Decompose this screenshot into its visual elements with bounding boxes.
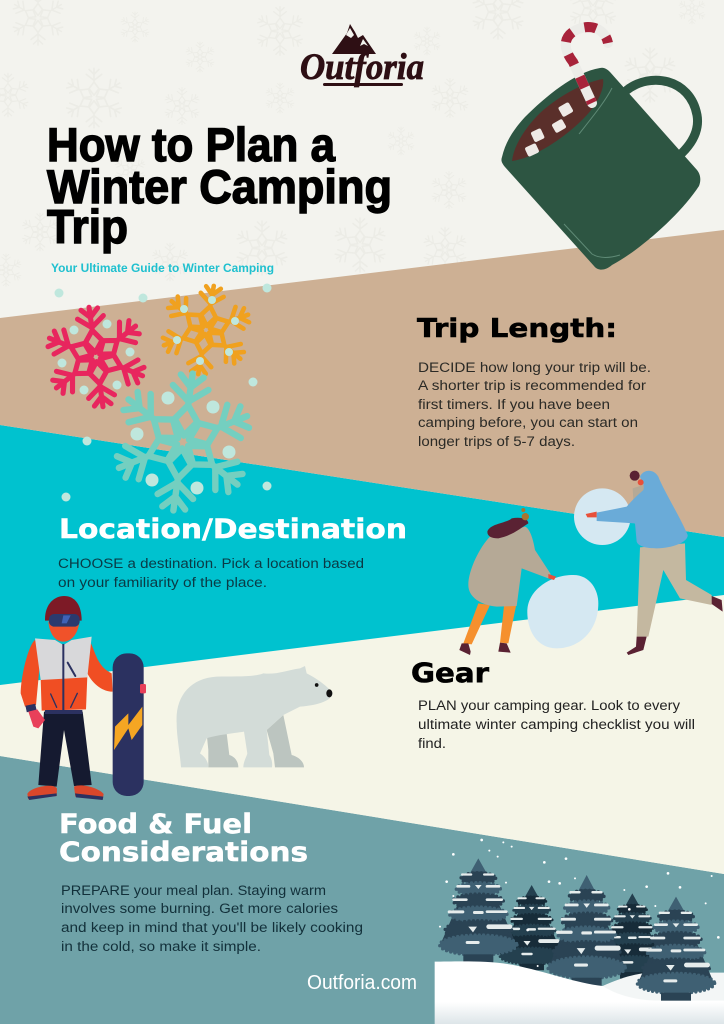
subtitle: Your Ultimate Guide to Winter Camping [51,261,274,275]
heading: gear: Gear [411,658,490,689]
text: gear body: find. [418,736,446,751]
panel: tan trip length band [0,230,724,537]
text: gear body [418,698,695,751]
text: trip length body [418,360,651,449]
text: trip length body: A shorter trip is recommended for [418,378,647,393]
title [47,118,392,253]
illustration: snowboarder [21,596,146,800]
text: trip length body: first timers. If you have been [418,397,610,412]
text: gear body: PLAN your camping gear. Look to every [418,698,680,713]
title: Winter Camping [47,160,392,213]
heading: food and fuel [59,809,308,868]
text: food and fuel body [61,883,363,954]
text: food and fuel body: PREPARE your meal plan. Staying warm [61,883,326,898]
logo: Outforia [300,47,424,88]
text: food and fuel body: involves some burning. Get more calories [61,901,338,916]
icon: cocoa mug with candy cane [501,27,700,270]
text: trip length body: longer trips of 5-7 days. [418,434,575,449]
illustration: snowy pine trees [435,839,724,1024]
heading: food and fuel: Considerations [59,837,308,868]
text: location body [58,556,364,590]
text: location body: on your familiarity of the place. [58,575,267,590]
heading: location: Location/Destination [59,514,407,545]
faint background snowflakes [0,0,706,286]
heading: trip length: Trip Length: [417,314,617,344]
icon: falling snowflakes [39,278,271,520]
panel: slate food band [0,756,724,1024]
text: gear body: ultimate winter camping checklist you will [418,717,695,732]
text: trip length body: camping before, you can start on [418,415,638,430]
heading: food and fuel: Food & Fuel [59,809,252,840]
text: food and fuel body: and keep in mind that you'll be likely cooking [61,920,363,935]
title: Trip [47,200,128,253]
panel: teal location band [0,425,724,685]
panel: cream gear band [0,595,724,874]
text: food and fuel body: in the cold, so make it simple. [61,939,261,954]
illustration: people rolling snowballs [459,471,723,655]
footer website: Outforia.com [307,972,417,994]
illustration: polar bear [177,666,333,767]
text: trip length body: DECIDE how long your trip will be. [418,360,651,375]
title: How to Plan a [47,118,336,171]
logo [300,24,424,88]
text: location body: CHOOSE a destination. Pick a location based [58,556,364,571]
